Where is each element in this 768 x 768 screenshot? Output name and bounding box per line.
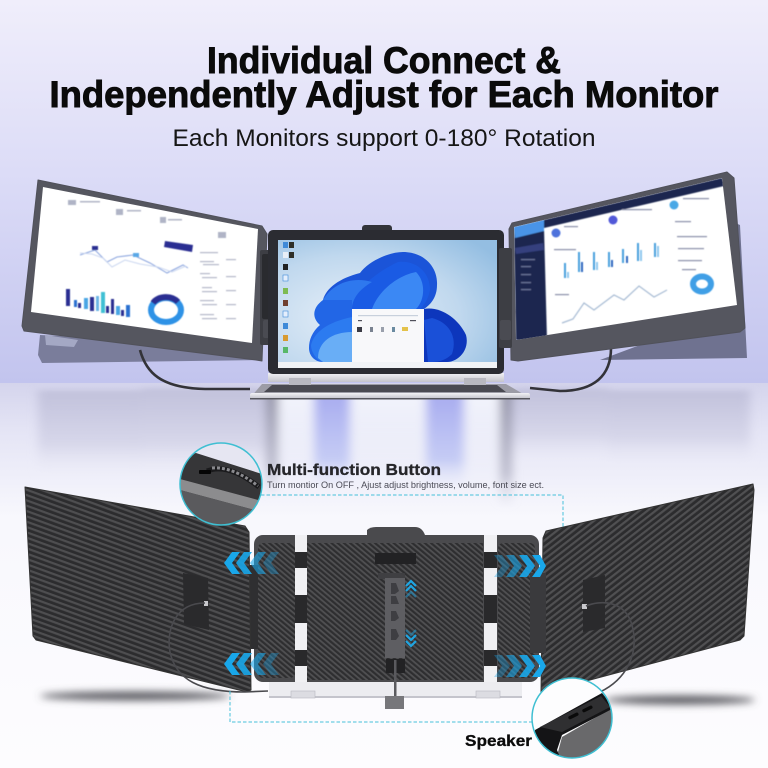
right monitor back panel	[600, 222, 747, 360]
left top chevrons	[224, 552, 279, 574]
right clip hinge	[499, 248, 512, 348]
title	[50, 40, 718, 115]
title: Independently Adjust for Each Monitor	[50, 74, 718, 115]
open window on desktop	[352, 309, 424, 362]
right cable loop	[586, 603, 634, 692]
left screen donut	[151, 297, 181, 322]
subtitle: Each Monitors support 0-180° Rotation	[172, 125, 596, 152]
rear bracket	[254, 527, 539, 682]
callout: multi-function button detail	[180, 443, 262, 525]
laptop screen	[268, 230, 504, 374]
callout: speaker detail	[532, 678, 614, 762]
dashed leader: speaker	[230, 691, 532, 722]
dashed leader: multi-function button	[261, 495, 563, 527]
left screen bar chart	[66, 289, 130, 317]
center kickstand	[378, 573, 405, 709]
left rear monitor panel	[25, 487, 258, 692]
laptop base and keyboard	[250, 373, 530, 400]
left cable	[140, 350, 250, 389]
left bottom chevrons	[224, 653, 279, 675]
right monitor	[509, 172, 745, 361]
bottom left shadow	[40, 692, 230, 700]
left screen list	[200, 252, 236, 319]
left screen line chart	[80, 250, 188, 273]
bracket sliding strips	[295, 535, 497, 682]
laptop top clamp	[362, 225, 392, 233]
small vertical arrows	[406, 581, 416, 646]
left screen header tiles	[68, 200, 226, 238]
laptop silver base, rear view	[269, 676, 522, 698]
right top chevrons	[494, 555, 546, 577]
background wall	[0, 0, 768, 384]
right screen donut	[693, 276, 711, 292]
right bottom chevrons	[494, 655, 546, 677]
desk reflection	[38, 388, 750, 508]
left screen button	[164, 241, 193, 252]
left monitor back panel	[38, 335, 262, 363]
left monitor	[22, 180, 267, 361]
right screen bar chart	[564, 243, 659, 278]
right screen header and sidebar	[514, 178, 724, 340]
right cable	[530, 348, 611, 391]
label: speaker: Speaker	[465, 733, 532, 750]
windows wallpaper bloom	[309, 252, 467, 362]
left cable loop	[169, 603, 268, 692]
right screen line chart	[562, 286, 667, 323]
label: multi-function button: Multi-function Button	[267, 462, 441, 479]
description: multi-function button: Turn montior On OFF , Ajust adjust brightness, volume, font size ect.	[267, 480, 544, 490]
right screen stat tiles	[552, 228, 560, 238]
right rear monitor panel	[530, 484, 754, 692]
title: Individual Connect &	[207, 40, 561, 81]
desk surface	[0, 383, 768, 768]
left clip hinge	[260, 250, 275, 345]
taskbar	[278, 362, 497, 368]
bottom right shadow	[605, 696, 755, 704]
desktop icons	[283, 242, 294, 353]
